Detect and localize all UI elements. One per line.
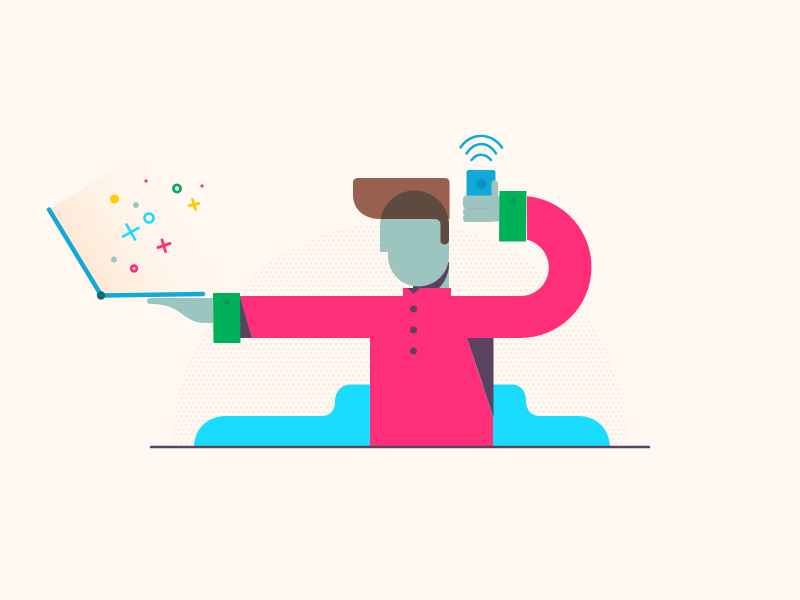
illustration: person with laptop and phone: [46, 134, 650, 448]
collar notch: [407, 288, 420, 294]
wifi signal: [460, 136, 502, 160]
hair: [353, 178, 450, 244]
laptop screen glow: [49, 138, 255, 292]
shirt shadows: [240, 197, 538, 417]
shirt torso and arms: [240, 196, 591, 446]
right cuff: [499, 191, 526, 242]
ground line: [151, 446, 649, 448]
laptop: [49, 210, 203, 300]
hand holding phone: [463, 180, 500, 222]
dotted semicircle background: [172, 222, 628, 446]
shirt buttons: [410, 306, 417, 354]
hand under laptop: [147, 298, 213, 323]
phone: [466, 170, 496, 200]
floating icons: [110, 179, 204, 271]
left cuff: [213, 293, 240, 343]
head: [380, 191, 449, 286]
neck: [413, 262, 449, 290]
seated legs: [194, 384, 610, 446]
